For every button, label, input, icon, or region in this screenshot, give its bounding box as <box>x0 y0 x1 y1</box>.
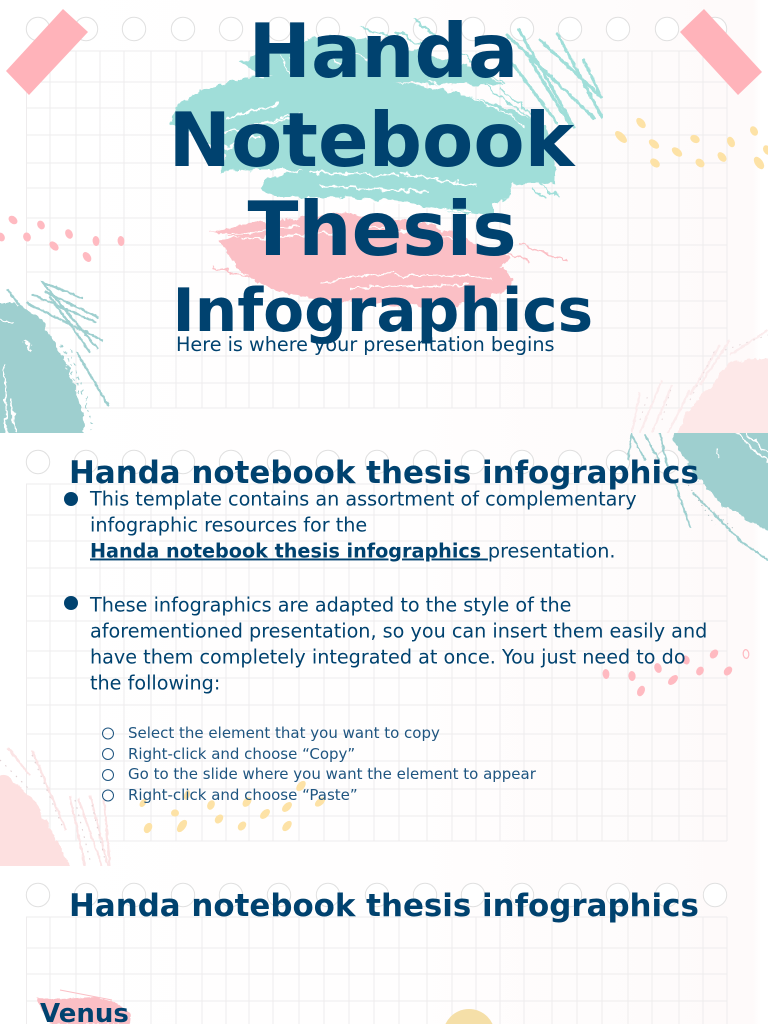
subtitle: Here is where your presentation begins <box>176 333 555 356</box>
notebook holes: slide 3 <box>26 883 727 907</box>
bullet 1: This template contains an assortment of complementary <box>89 488 637 510</box>
pink washi tape left <box>6 9 88 95</box>
sub-bullet list: Go to the slide where you want the element to appear <box>128 765 537 783</box>
teal scribble hatch <box>507 30 602 127</box>
bullet 2: the following: <box>90 672 220 694</box>
sub-bullet list <box>102 724 537 804</box>
sub-bullet list: Right-click and choose “Copy” <box>128 745 355 763</box>
pink brush stroke behind title <box>210 213 567 307</box>
yellow dots, slide 2 <box>138 779 327 835</box>
title <box>168 8 593 346</box>
teal brush swoosh right, slide 2 <box>628 420 768 560</box>
pale pink swoosh bottom left, slide 2 <box>0 748 110 880</box>
bullet 2: aforementioned presentation, so you can insert them easily and <box>90 620 707 642</box>
teal brush stroke behind title <box>169 17 560 215</box>
bullet 1 <box>64 488 637 562</box>
title: Handa <box>248 8 518 95</box>
Venus label with pink brush <box>36 990 131 1024</box>
bullet 1: infographic resources for the <box>90 514 367 536</box>
sub-bullet list: Right-click and choose “Paste” <box>128 786 358 804</box>
yellow planet circle <box>443 1009 495 1024</box>
pink washi tape right <box>680 9 762 95</box>
notebook holes: slide 1 <box>26 17 727 41</box>
slide 2 heading: Handa notebook thesis infographics <box>69 455 699 491</box>
notebook holes: slide 2 <box>26 450 679 474</box>
pink dots right, slide 2 <box>602 648 749 698</box>
title: Thesis <box>248 186 517 273</box>
pale pink swoosh right, slide 1 <box>632 330 768 445</box>
yellow dots top right <box>613 116 768 171</box>
sub-bullet list: Select the element that you want to copy <box>128 724 440 742</box>
bullet 1: Handa notebook thesis infographics presentation. <box>90 540 615 562</box>
bullet 2: These infographics are adapted to the style of the <box>89 594 571 616</box>
slide 3 heading: Handa notebook thesis infographics <box>69 888 699 924</box>
bullet 2 <box>64 594 707 694</box>
title: Infographics <box>172 277 593 346</box>
title: Notebook <box>168 97 577 184</box>
pink dots left <box>0 214 125 264</box>
teal brush swoosh bottom left <box>0 282 108 445</box>
bullet 2: have them completely integrated at once. You just need to do <box>90 646 686 668</box>
